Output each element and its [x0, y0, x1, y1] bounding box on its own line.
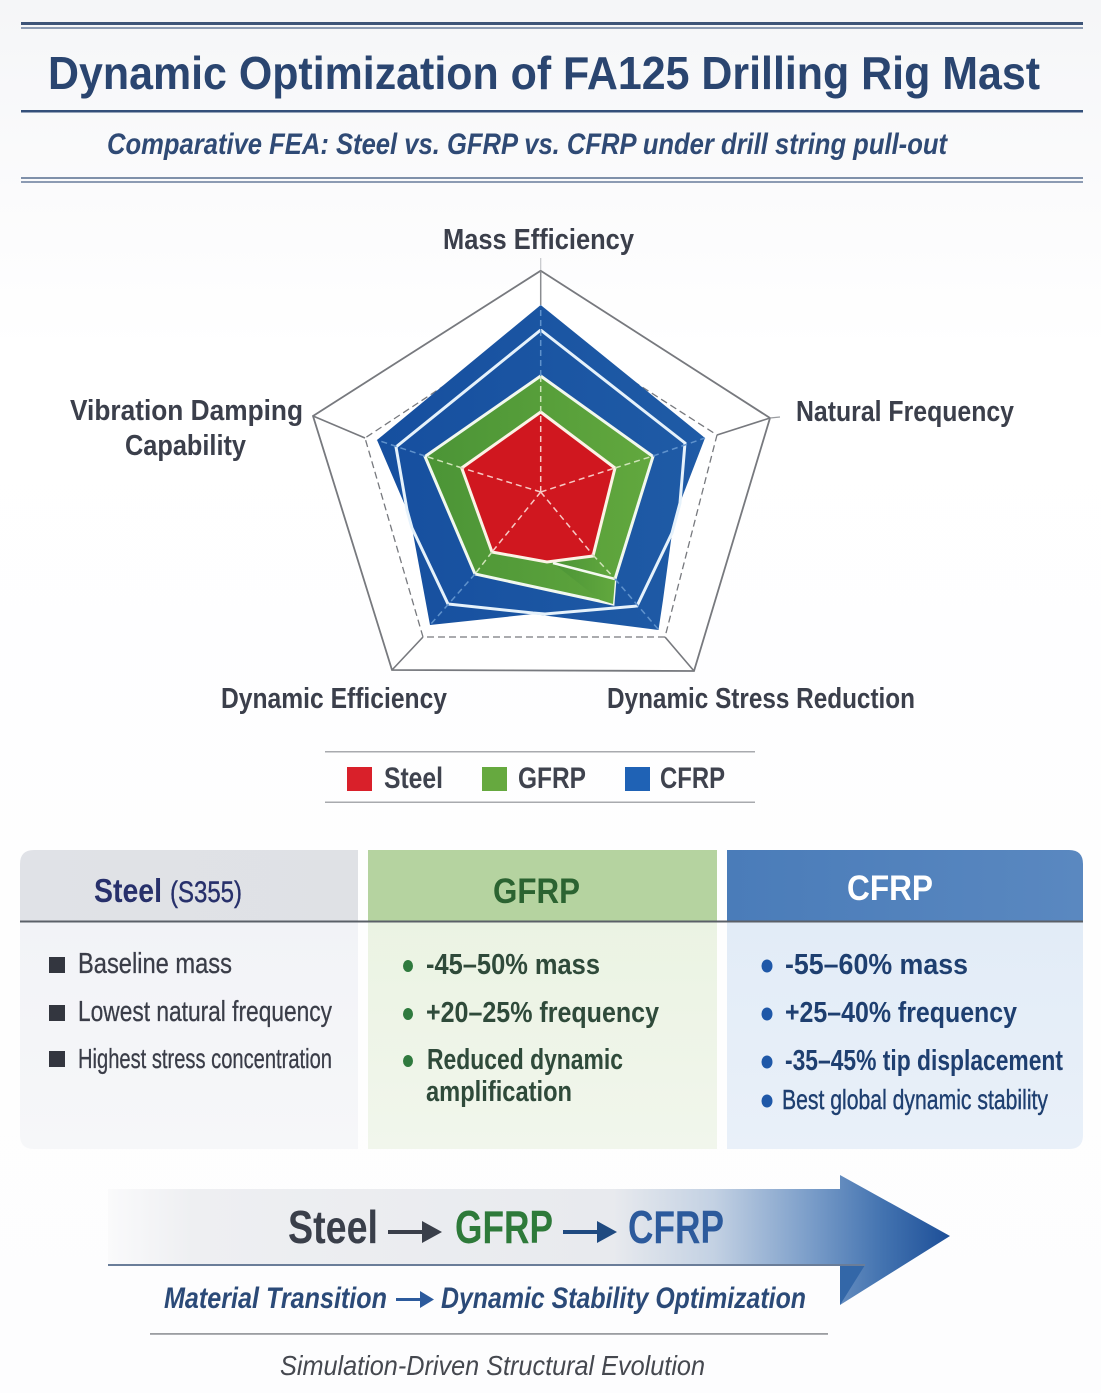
legend: CFRP — [625, 762, 725, 795]
legend: GFRP — [482, 762, 586, 795]
list: GFRP properties — [403, 949, 659, 1108]
arrow head fold — [840, 1265, 865, 1305]
list: GFRP properties: -45–50% mass — [426, 949, 600, 981]
axis label: Natural Frequency: Natural Frequency — [796, 396, 1014, 428]
list: Steel properties — [49, 948, 332, 1074]
header band — [21, 22, 1083, 183]
heading: CFRP: CFRP — [847, 869, 933, 908]
GFRP step edge — [553, 557, 615, 604]
footer tagline: Simulation-Driven Structural Evolution — [280, 1350, 705, 1381]
list: Steel properties: Lowest natural frequency — [78, 996, 332, 1028]
axis label: Dynamic Stress Reduction: Dynamic Stress Reduction — [607, 683, 915, 715]
axis label: Mass Efficiency: Mass Efficiency — [443, 224, 634, 256]
series: CFRP — [377, 305, 705, 630]
arrow body — [108, 1175, 950, 1305]
legend: Steel — [347, 762, 443, 795]
list: Steel properties: Highest stress concentration — [78, 1043, 332, 1074]
sequence: Steel to GFRP to CFRP — [288, 1201, 724, 1253]
panel: Steel: (S355) — [170, 876, 242, 909]
caption: material transition: Dynamic Stability Optimization — [441, 1282, 806, 1315]
heading: GFRP: GFRP — [493, 872, 580, 911]
radar dashed grid — [365, 322, 717, 637]
list: CFRP properties — [762, 949, 1063, 1115]
panel: Steel — [20, 850, 358, 1149]
list: GFRP properties: Reduced dynamic — [427, 1044, 623, 1076]
list: GFRP properties: +20–25% frequency — [426, 997, 659, 1029]
radar spokes — [377, 305, 705, 629]
subtitle: Comparative FEA: Steel vs. GFRP vs. CFRP under drill string pull-out — [107, 128, 949, 161]
panel: CFRP — [727, 850, 1083, 1149]
axis label: Dynamic Efficiency: Dynamic Efficiency — [221, 683, 447, 715]
arrow: GFRP to CFRP — [563, 1221, 617, 1243]
list: CFRP properties: +25–40% frequency — [785, 997, 1017, 1029]
axis label: Vibration Damping Capability: Vibration Damping — [70, 395, 303, 427]
steel lower edge highlight — [553, 563, 615, 579]
sequence: Steel to GFRP to CFRP: Steel — [288, 1201, 378, 1253]
caption: material transition — [164, 1282, 806, 1315]
arrow: Steel to GFRP — [388, 1221, 442, 1243]
radar chart — [70, 224, 1014, 715]
legend: Steel: Steel — [384, 762, 443, 795]
radar outer grid — [313, 271, 770, 671]
sequence: Steel to GFRP to CFRP: CFRP — [628, 1201, 724, 1253]
title: Dynamic Optimization of FA125 Drilling Rig Mast — [48, 47, 1040, 99]
axis label: Vibration Damping Capability — [70, 395, 303, 462]
legend: GFRP: GFRP — [518, 762, 586, 795]
arrow: transition to optimization — [396, 1291, 434, 1308]
series: GFRP — [425, 376, 653, 604]
series: Steel — [462, 412, 615, 562]
list: GFRP properties: amplification — [426, 1076, 572, 1108]
axis label: Vibration Damping Capability: Capability — [125, 430, 246, 462]
legend — [325, 751, 755, 803]
list: CFRP properties: -55–60% mass — [785, 949, 968, 981]
sequence: Steel to GFRP to CFRP: GFRP — [455, 1201, 553, 1253]
comparison table — [20, 850, 1083, 1149]
heading: Steel (S355): Steel — [94, 872, 162, 909]
legend: CFRP: CFRP — [660, 762, 725, 795]
panel: GFRP — [368, 850, 717, 1149]
inner CFRP outline — [396, 330, 685, 614]
caption: material transition: Material Transition — [164, 1282, 387, 1315]
list: Steel properties: Baseline mass — [78, 948, 232, 980]
transition arrow — [108, 1175, 950, 1315]
